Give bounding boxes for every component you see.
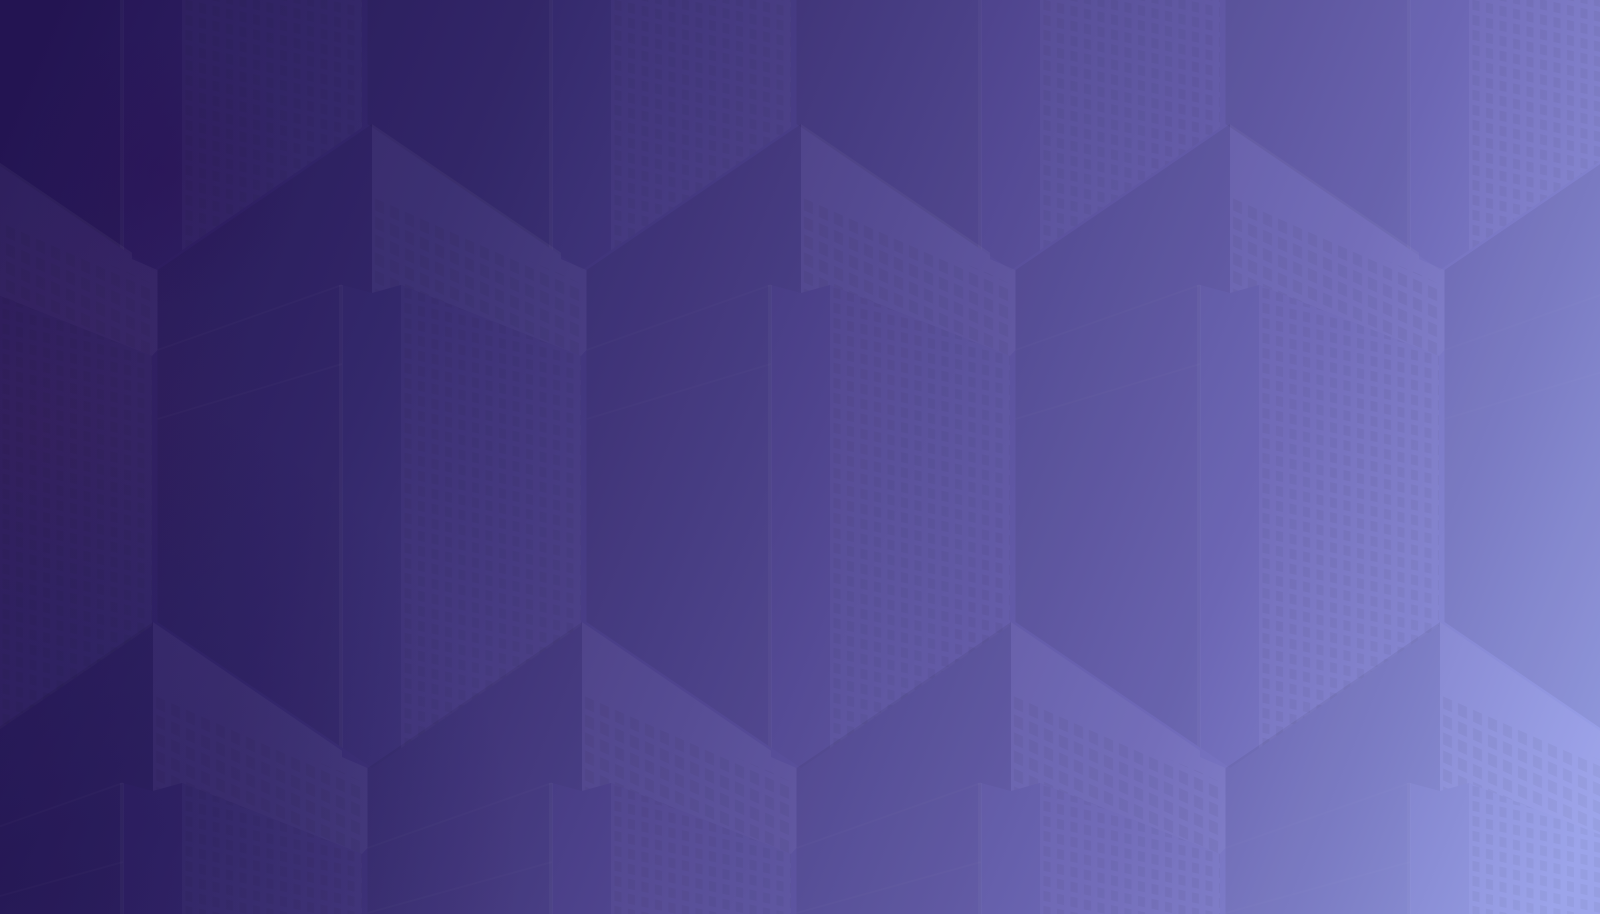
tile row 0 xyxy=(0,0,1600,270)
tile row 1 xyxy=(0,124,1600,768)
tile row 2 xyxy=(0,622,1600,914)
